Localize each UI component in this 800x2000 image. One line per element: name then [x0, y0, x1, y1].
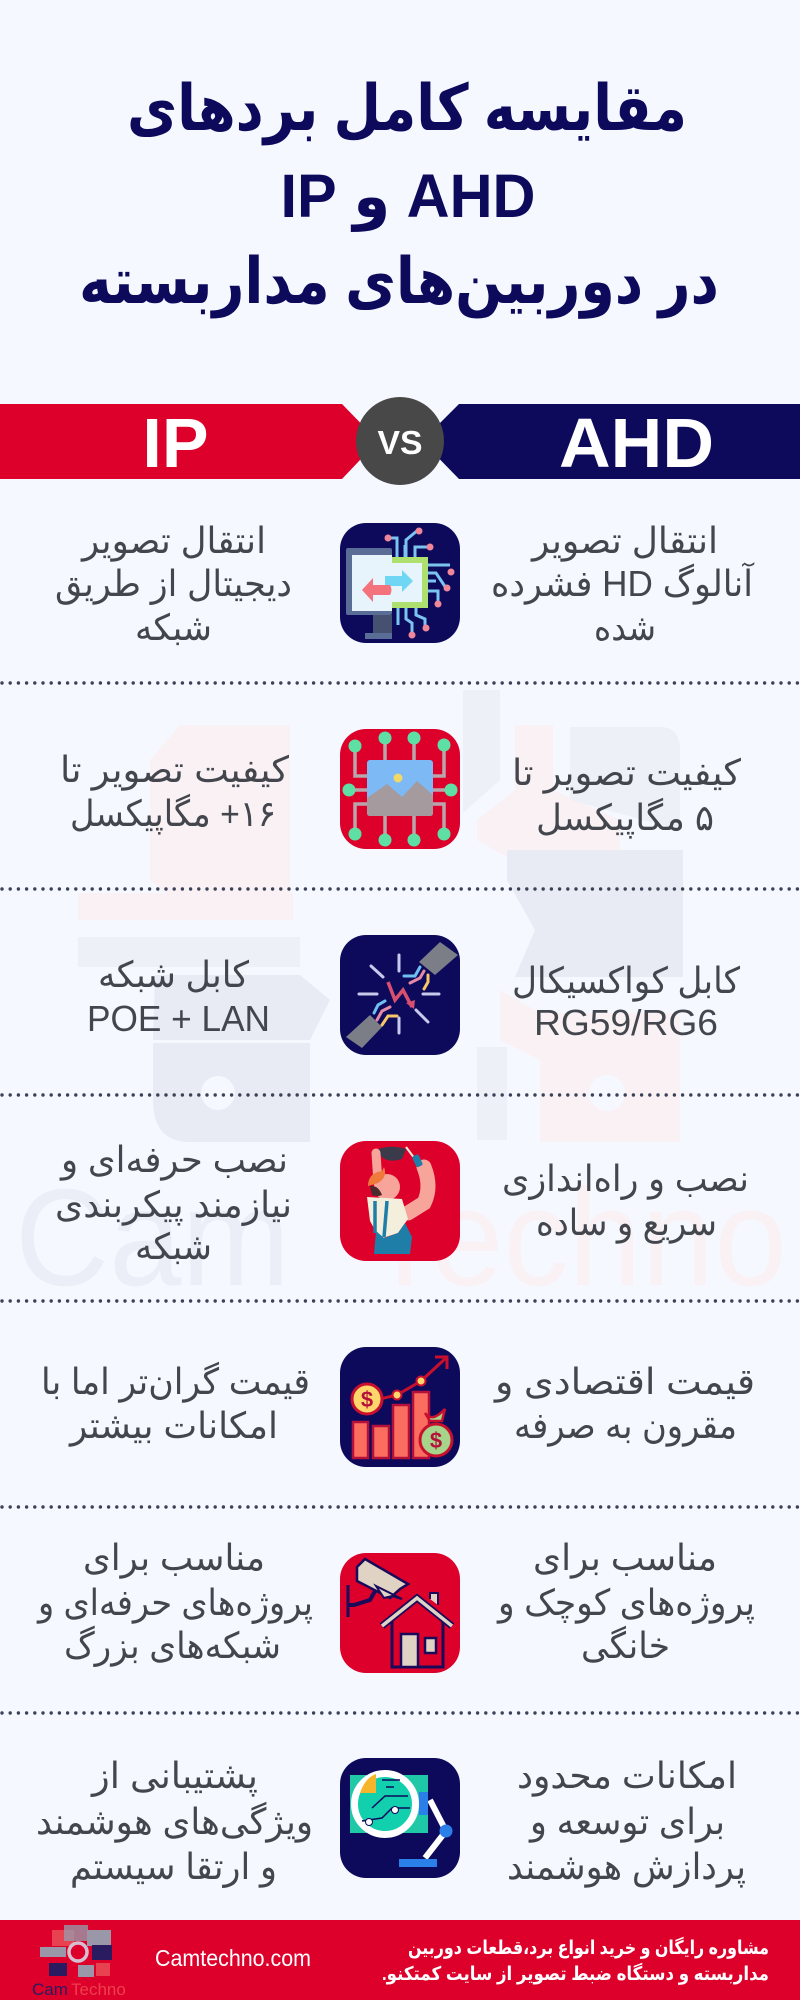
AHD text: [491, 520, 755, 648]
IP text: دیجیتال از طریق: [55, 563, 292, 605]
IP text: [36, 1755, 313, 1888]
IP text: کیفیت تصویر تا: [60, 749, 290, 791]
AHD text: انتقال تصویر: [530, 520, 718, 562]
AHD text: پردازش هوشمند: [507, 1846, 746, 1888]
AHD text: [502, 1158, 749, 1244]
watermark: Cam Techno logo: Techno: [365, 1161, 787, 1315]
IP text: نصب حرفه‌ای و: [59, 1139, 288, 1181]
title: [79, 72, 719, 319]
IP text: ویژگی‌های هوشمند: [36, 1801, 313, 1843]
watermark: Cam Techno logo: Cam: [15, 1161, 290, 1315]
footer logo: [32, 1925, 126, 1999]
IP ribbon: [0, 404, 378, 482]
website: Camtechno.com: [155, 1945, 311, 1971]
icon: technician: [340, 1141, 460, 1261]
AHD text: کیفیت تصویر تا: [512, 752, 742, 794]
title: در دوربین‌های مداربسته: [79, 245, 719, 319]
IP text: [60, 749, 290, 835]
footer message: [382, 1936, 769, 1985]
row 6: suitable projects: [36, 1537, 755, 1673]
AHD text: مقرون به صرفه: [514, 1405, 737, 1447]
IP text: نیازمند پیکربندی: [55, 1184, 292, 1226]
IP text: شبکه: [135, 1226, 212, 1267]
IP text: [41, 1361, 310, 1447]
IP text: قیمت گران‌تر اما با: [41, 1361, 310, 1403]
row 5: price: [41, 1347, 755, 1467]
footer logo: Cam: [32, 1980, 68, 1999]
IP text: انتقال تصویر: [80, 520, 266, 562]
AHD text: پروژه‌های کوچک و: [496, 1582, 755, 1624]
AHD text: امکانات محدود: [517, 1755, 737, 1797]
IP text: [55, 520, 292, 648]
IP text: شبکه‌های بزرگ: [64, 1625, 281, 1667]
IP text: پشتیبانی از: [90, 1755, 258, 1797]
AHD text: شده: [594, 607, 656, 648]
AHD ribbon: [422, 404, 800, 482]
AHD text: ۵ مگاپیکسل: [536, 797, 714, 839]
AHD text: برای توسعه و: [528, 1801, 725, 1843]
row 1: signal transmission: [55, 520, 755, 648]
IP text: [36, 1537, 313, 1667]
vs badge: VS: [378, 424, 422, 461]
watermark: Cam Techno logo: [15, 690, 787, 1315]
IP text: و ارتقا سیستم: [70, 1846, 277, 1888]
IP text: POE + LAN: [87, 998, 270, 1039]
row 4: installation: [55, 1139, 749, 1267]
title: AHD و IP: [280, 162, 536, 232]
AHD text: خانگی: [581, 1625, 670, 1666]
AHD text: نصب و راه‌اندازی: [502, 1158, 749, 1200]
icon: broken cable: [340, 935, 460, 1055]
IP text: [55, 1139, 292, 1267]
IP ribbon: IP: [142, 404, 209, 482]
AHD text: [507, 1755, 746, 1888]
AHD text: [512, 752, 742, 839]
AHD text: کابل کواکسیکال: [512, 960, 741, 1002]
AHD text: مناسب برای: [533, 1537, 717, 1579]
AHD text: آنالوگ HD فشرده: [491, 561, 755, 605]
row 7: smart features: [36, 1755, 746, 1888]
AHD text: [512, 960, 741, 1043]
row 3: cabling: [87, 935, 741, 1055]
icon: rising cost chart: [340, 1347, 460, 1467]
IP text: [87, 954, 270, 1039]
header banner: IP vs AHD: [0, 397, 800, 485]
AHD ribbon: AHD: [559, 404, 714, 482]
IP text: شبکه: [135, 607, 212, 648]
icon: monitor and chip: [340, 523, 460, 643]
vs badge: [356, 397, 444, 485]
icon: rising cost chart: $: [430, 1428, 442, 1453]
AHD text: قیمت اقتصادی و: [493, 1361, 755, 1403]
IP text: ۱۶+ مگاپیکسل: [70, 793, 276, 835]
row 2: image quality: [60, 729, 742, 849]
AHD text: RG59/RG6: [534, 1002, 718, 1043]
AHD text: سریع و ساده: [536, 1202, 717, 1244]
AHD text: [496, 1537, 755, 1666]
icon: circuit under magnifier: [340, 1758, 460, 1878]
icon: camera and house: [340, 1553, 460, 1673]
IP text: امکانات بیشتر: [68, 1405, 278, 1447]
title: مقایسه کامل بردهای: [127, 72, 687, 146]
footer logo: Techno: [71, 1980, 126, 1999]
IP text: پروژه‌های حرفه‌ای و: [36, 1582, 313, 1624]
footer: [0, 1920, 800, 2000]
IP text: مناسب برای: [83, 1537, 265, 1579]
IP text: کابل شبکه: [98, 954, 250, 995]
icon: image chip: [340, 729, 460, 849]
AHD text: [493, 1361, 755, 1447]
icon: rising cost chart: $: [361, 1387, 373, 1412]
